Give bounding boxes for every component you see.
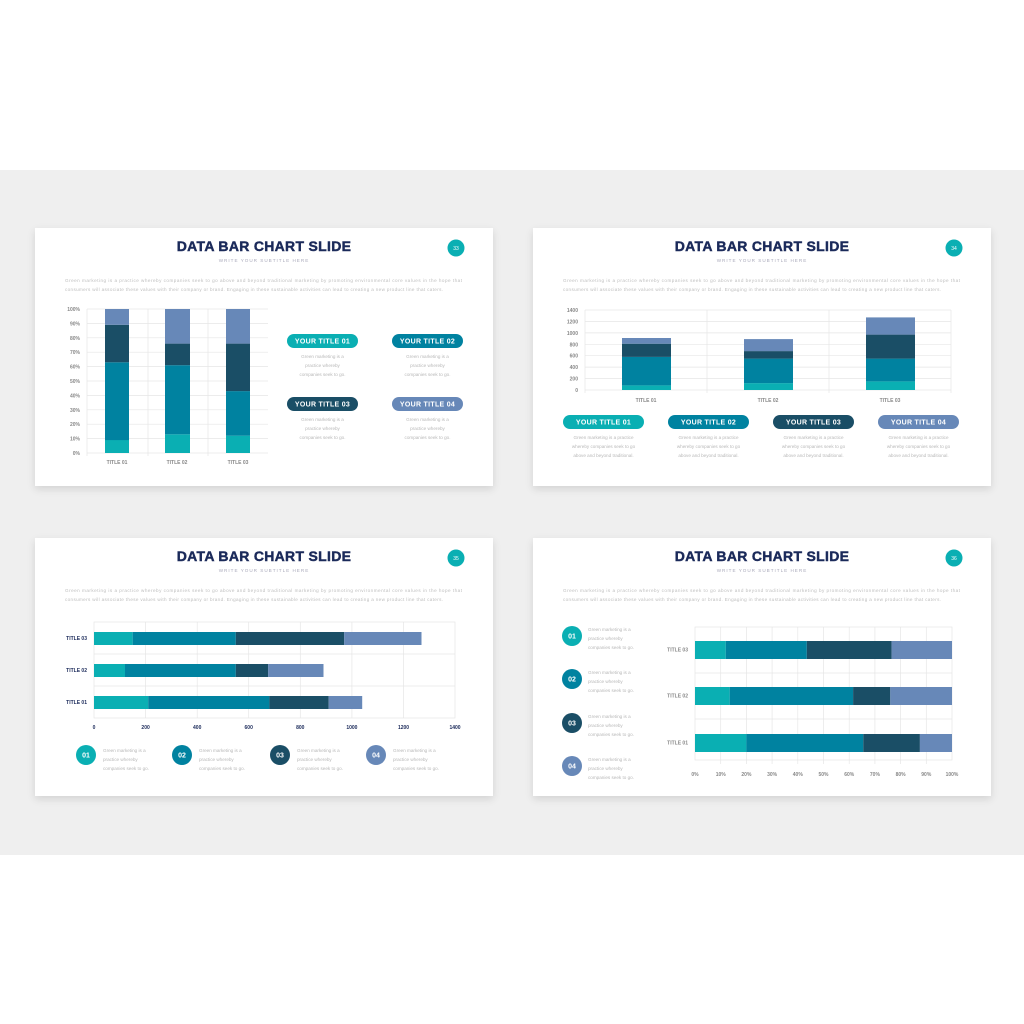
paragraph — [563, 278, 961, 292]
legend pills: practice whereby — [410, 363, 446, 368]
numbered legend: Green marketing is a — [199, 748, 242, 753]
title: WRITE YOUR SUBTITLE HERE — [219, 258, 309, 263]
legend pills: Green marketing is a — [406, 354, 449, 359]
column chart: 20% — [70, 422, 81, 428]
paragraph — [563, 588, 961, 602]
numbered legend: companies seek to go. — [199, 766, 245, 771]
paragraph: Green marketing is a practice whereby companies seek to go above and beyond traditional marketing by promoting environmental core values in the hope that — [563, 588, 961, 593]
legend pills: YOUR TITLE 03 — [295, 402, 350, 408]
numbered legend: practice whereby — [297, 757, 332, 762]
numbered legend: 03 — [276, 752, 284, 760]
numbered legend: practice whereby — [588, 636, 623, 641]
legend pills: above and beyond traditional. — [573, 453, 634, 458]
title: DATA BAR CHART SLIDE — [675, 238, 849, 254]
legend pills: practice whereby — [305, 363, 341, 368]
column chart: 70% — [70, 350, 81, 356]
column chart: TITLE 03 — [880, 398, 901, 404]
paragraph — [65, 278, 463, 292]
column chart: 0% — [73, 451, 81, 457]
horizontal percent bar chart — [667, 627, 959, 778]
column chart: 60% — [70, 365, 81, 371]
column chart: 200 — [570, 377, 578, 383]
legend pills: Green marketing is a — [301, 354, 344, 359]
numbered legend: Green marketing is a — [588, 670, 631, 675]
numbered legend: 02 — [568, 676, 576, 684]
numbered legend: companies seek to go. — [588, 645, 634, 650]
title: WRITE YOUR SUBTITLE HERE — [717, 568, 807, 573]
horizontal percent bar chart: 10% — [716, 772, 726, 778]
title: DATA BAR CHART SLIDE — [177, 548, 351, 564]
horizontal percent bar chart: 70% — [870, 772, 880, 778]
column chart: 600 — [570, 354, 578, 360]
column chart: TITLE 01 — [636, 398, 657, 404]
horizontal percent bar chart: 20% — [741, 772, 752, 778]
column chart: 100% — [67, 307, 81, 313]
numbered legend: 04 — [372, 752, 380, 760]
legend pills — [563, 415, 959, 458]
numbered legend: practice whereby — [103, 757, 138, 762]
title — [675, 238, 849, 263]
paragraph: consumers will associate these values with their company or brand. Engaging in these sustainable activities can lead to creating a new product line that caters. — [65, 287, 443, 292]
title: WRITE YOUR SUBTITLE HERE — [219, 568, 309, 573]
horizontal percent bar chart: 40% — [793, 772, 803, 778]
horizontal percent bar chart: 30% — [767, 772, 778, 778]
horizontal bar chart: 1400 — [449, 725, 461, 731]
column chart: 50% — [70, 379, 81, 385]
title: DATA BAR CHART SLIDE — [177, 238, 351, 254]
page badge: 36 — [951, 556, 957, 562]
paragraph: Green marketing is a practice whereby companies seek to go above and beyond traditional marketing by promoting environmental core values in the hope that — [65, 588, 463, 593]
numbered legend: Green marketing is a — [588, 757, 631, 762]
horizontal percent bar chart: 100% — [946, 772, 959, 778]
legend pills: YOUR TITLE 01 — [295, 338, 350, 346]
legend pills: whereby companies seek to go — [677, 444, 741, 449]
paragraph: consumers will associate these values with their company or brand. Engaging in these sustainable activities can lead to creating a new product line that caters. — [563, 287, 941, 292]
numbered legend: companies seek to go. — [588, 775, 634, 780]
numbered legend: 04 — [568, 764, 576, 770]
numbered legend: 01 — [82, 752, 90, 760]
numbered legend: practice whereby — [393, 757, 428, 762]
horizontal bar chart: 0 — [93, 725, 96, 731]
title — [177, 548, 351, 573]
legend pills: whereby companies seek to go — [572, 444, 636, 449]
legend pills: YOUR TITLE 03 — [786, 420, 841, 426]
numbered legend: 03 — [568, 720, 576, 728]
column chart: 0 — [575, 388, 578, 394]
page badge — [448, 550, 464, 566]
legend pills: Green marketing is a practice — [784, 435, 844, 440]
horizontal percent bar chart: 50% — [818, 772, 829, 778]
horizontal bar chart: 1000 — [346, 725, 358, 731]
title — [675, 548, 849, 573]
legend pills: practice whereby — [410, 426, 446, 431]
legend pills: whereby companies seek to go — [887, 444, 951, 449]
column chart: TITLE 02 — [167, 460, 188, 466]
legend pills: above and beyond traditional. — [888, 453, 949, 458]
horizontal percent bar chart: TITLE 01 — [667, 740, 688, 746]
numbered legend — [76, 745, 439, 771]
horizontal bar chart: 800 — [296, 725, 305, 731]
horizontal bar chart: 400 — [193, 725, 202, 731]
column chart: 30% — [70, 408, 81, 414]
legend pills: Green marketing is a practice — [574, 435, 634, 440]
numbered legend: practice whereby — [588, 679, 623, 684]
horizontal percent bar chart: TITLE 03 — [667, 648, 688, 654]
numbered legend: companies seek to go. — [297, 766, 343, 771]
horizontal percent bar chart: 80% — [896, 772, 906, 778]
legend pills: Green marketing is a practice — [888, 435, 949, 440]
legend pills: whereby companies seek to go — [782, 444, 846, 449]
page badge — [448, 240, 464, 256]
numbered legend: companies seek to go. — [393, 766, 439, 771]
title: WRITE YOUR SUBTITLE HERE — [717, 258, 807, 263]
legend pills: companies seek to go. — [300, 372, 345, 377]
column chart: 1000 — [567, 331, 578, 337]
numbered legend: practice whereby — [588, 723, 623, 728]
paragraph — [65, 588, 463, 602]
column chart: 1400 — [567, 308, 578, 314]
horizontal bar chart — [66, 622, 461, 731]
column chart: 800 — [570, 342, 578, 348]
legend pills: above and beyond traditional. — [678, 453, 739, 458]
numbered legend: practice whereby — [199, 757, 234, 762]
page badge — [946, 550, 962, 566]
legend pills: companies seek to go. — [300, 435, 345, 440]
numbered legend: Green marketing is a — [393, 748, 436, 753]
title: DATA BAR CHART SLIDE — [675, 548, 849, 564]
horizontal bar chart: TITLE 01 — [66, 700, 87, 706]
page badge: 35 — [453, 556, 459, 562]
horizontal bar chart: TITLE 03 — [66, 636, 87, 642]
paragraph: consumers will associate these values with their company or brand. Engaging in these sustainable activities can lead to creating a new product line that caters. — [65, 597, 443, 602]
legend pills: YOUR TITLE 04 — [891, 420, 946, 426]
column chart: 10% — [70, 437, 81, 443]
panel: slide 33 stacked percent columns — [35, 228, 493, 486]
legend pills: above and beyond traditional. — [783, 453, 844, 458]
numbered legend: Green marketing is a — [103, 748, 146, 753]
legend pills: YOUR TITLE 02 — [400, 338, 455, 346]
numbered legend: companies seek to go. — [588, 732, 634, 737]
horizontal percent bar chart: 0% — [691, 772, 699, 778]
title — [177, 238, 351, 263]
numbered legend: companies seek to go. — [103, 766, 149, 771]
horizontal bar chart: 1200 — [398, 725, 409, 731]
paragraph: Green marketing is a practice whereby companies seek to go above and beyond traditional marketing by promoting environmental core values in the hope that — [65, 278, 463, 283]
legend pills — [287, 334, 463, 440]
page badge: 33 — [453, 246, 459, 252]
horizontal bar chart: 600 — [245, 725, 253, 731]
legend pills: Green marketing is a — [301, 417, 344, 422]
column chart: 400 — [570, 365, 578, 371]
paragraph: Green marketing is a practice whereby companies seek to go above and beyond traditional marketing by promoting environmental core values in the hope that — [563, 278, 961, 283]
horizontal percent bar chart: 90% — [921, 772, 932, 778]
panel: slide 36 horizontal stacked percent — [533, 538, 991, 796]
column chart: 80% — [70, 336, 81, 342]
paragraph: consumers will associate these values with their company or brand. Engaging in these sustainable activities can lead to creating a new product line that caters. — [563, 597, 941, 602]
legend pills: Green marketing is a practice — [678, 435, 739, 440]
legend pills: Green marketing is a — [406, 417, 449, 422]
column chart: 90% — [70, 321, 81, 327]
numbered legend: 01 — [568, 634, 576, 640]
column chart: 40% — [70, 393, 81, 399]
panel: slide 35 horizontal stacked values — [35, 538, 493, 796]
legend pills: companies seek to go. — [405, 435, 450, 440]
numbered legend: Green marketing is a — [297, 748, 340, 753]
legend pills: companies seek to go. — [405, 372, 450, 377]
column chart: TITLE 01 — [107, 460, 128, 466]
numbered legend — [562, 626, 634, 780]
horizontal percent bar chart: TITLE 02 — [667, 694, 688, 700]
numbered legend: Green marketing is a — [588, 627, 631, 632]
page badge — [946, 240, 962, 256]
panel: slide 34 stacked value columns — [533, 228, 991, 486]
column chart: TITLE 02 — [758, 398, 779, 404]
numbered legend: Green marketing is a — [588, 714, 631, 719]
numbered legend: practice whereby — [588, 766, 623, 771]
horizontal percent bar chart: 60% — [844, 772, 855, 778]
legend pills: YOUR TITLE 02 — [681, 420, 736, 426]
legend pills: YOUR TITLE 01 — [576, 420, 631, 426]
column chart — [67, 307, 268, 466]
numbered legend: companies seek to go. — [588, 688, 634, 693]
column chart: 1200 — [567, 319, 578, 325]
horizontal bar chart: 200 — [141, 725, 150, 731]
column chart — [567, 308, 951, 404]
page badge: 34 — [951, 246, 957, 252]
horizontal bar chart: TITLE 02 — [66, 668, 87, 674]
column chart: TITLE 03 — [228, 460, 249, 466]
numbered legend: 02 — [178, 752, 186, 760]
legend pills: YOUR TITLE 04 — [400, 402, 455, 408]
legend pills: practice whereby — [305, 426, 341, 431]
